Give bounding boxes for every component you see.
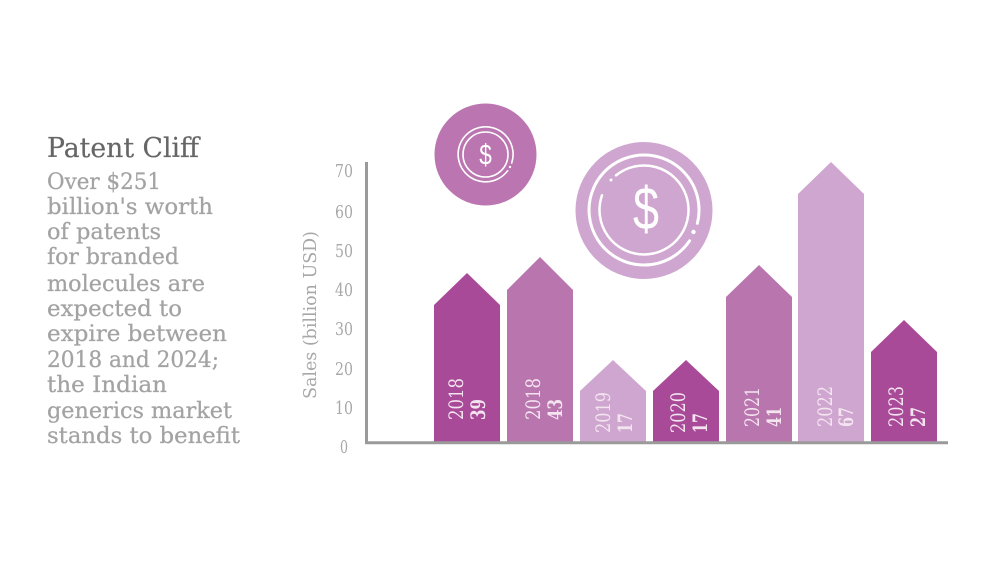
y axis labels: 40 — [335, 280, 353, 301]
bar: 2020 17: 17 — [688, 413, 712, 433]
y axis labels — [335, 161, 353, 458]
bar: 2021 41: 2021 — [740, 387, 764, 427]
bar: 2018 43: 43 — [543, 399, 567, 420]
icon: large dollar coin — [576, 142, 712, 279]
description text block: generics market — [47, 399, 232, 424]
description text block: molecules are — [47, 272, 205, 297]
bar: 2021 41: 41 — [762, 407, 786, 427]
bar: 2018 43: 2018 — [521, 378, 545, 420]
bar: 2020 17 — [653, 360, 719, 442]
description text block: for branded — [47, 245, 179, 270]
description text block: expected to — [47, 297, 182, 322]
description text block: stands to benefit — [47, 424, 240, 449]
bar: 2023 27 — [871, 320, 937, 442]
icon: small dollar coin — [434, 104, 536, 206]
bar: 2019 17: 17 — [613, 413, 637, 433]
bar: 2021 41 — [726, 265, 792, 442]
description text block: of patents — [47, 220, 161, 245]
description text block — [47, 170, 240, 449]
description text block: expire between — [47, 322, 227, 347]
title: Patent Cliff — [47, 133, 201, 164]
chart axes — [366, 162, 948, 443]
y axis labels: 50 — [335, 241, 353, 262]
bar: 2022 67: 2022 — [813, 386, 837, 427]
bar: 2018 39: 39 — [466, 399, 490, 420]
y axis labels: 30 — [335, 319, 353, 340]
bar: 2023 27: 27 — [906, 407, 930, 427]
bar: 2018 39 — [434, 273, 500, 442]
bar: 2023 27: 2023 — [884, 386, 908, 427]
bar: 2022 67: 67 — [834, 407, 858, 427]
bar: 2018 39: 2018 — [444, 378, 468, 420]
y axis labels: 20 — [335, 359, 353, 380]
bar: 2019 17: 2019 — [591, 392, 615, 433]
description text block: the Indian — [47, 373, 167, 398]
y axis labels: 10 — [335, 398, 353, 419]
y axis title: Sales (billion USD) — [300, 231, 321, 399]
description text block: 2018 and 2024; — [47, 348, 219, 373]
bar: 2020 17: 2020 — [666, 392, 690, 433]
y axis labels: 60 — [335, 202, 353, 223]
bar: 2018 43 — [507, 257, 573, 442]
icon: large dollar coin: $ — [633, 175, 659, 242]
description text block: billion's worth — [47, 195, 213, 220]
icon: small dollar coin: $ — [479, 138, 492, 171]
bar: 2019 17 — [580, 360, 646, 442]
y axis labels: 70 — [335, 161, 353, 182]
y axis labels: 0 — [340, 437, 348, 458]
description text block: Over $251 — [47, 170, 161, 195]
bar: 2022 67 — [798, 162, 864, 442]
